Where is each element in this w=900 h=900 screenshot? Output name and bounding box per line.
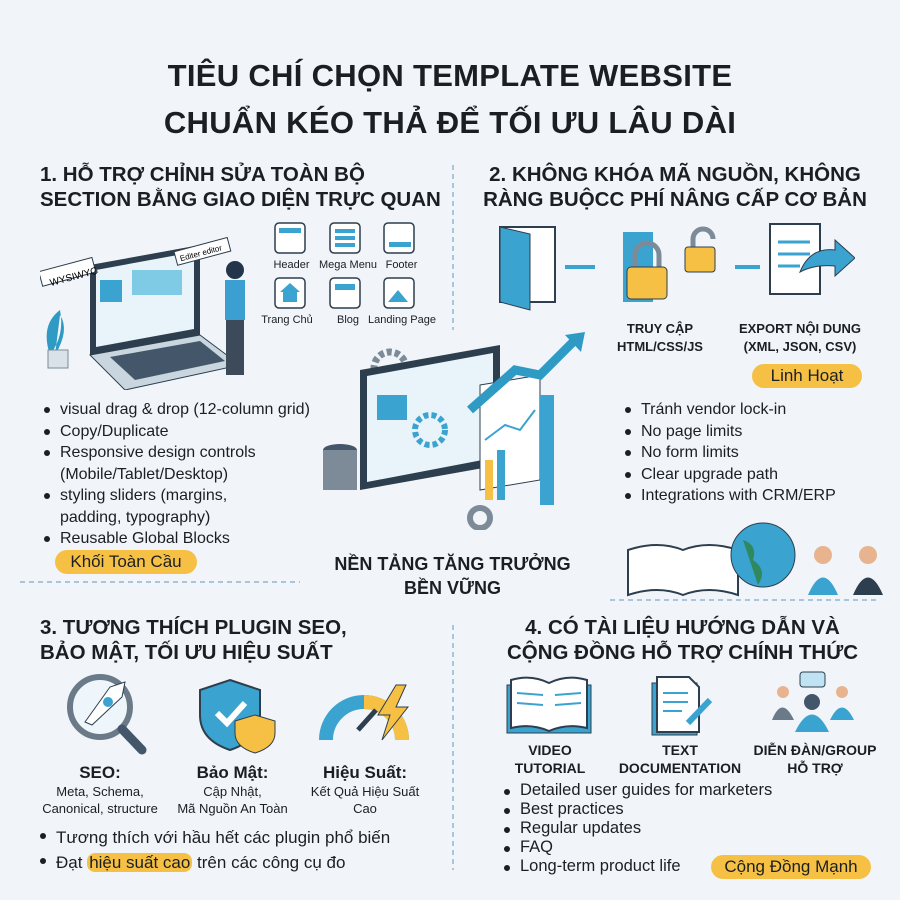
bullets panel 1 — [44, 401, 310, 547]
icons: page sections: Footer — [386, 259, 417, 271]
label: export: (XML, JSON, CSV) — [744, 339, 856, 354]
bullets panel 1: visual drag & drop (12-column grid) — [60, 401, 310, 418]
illustration: laptop editor: Editer editor — [179, 243, 223, 263]
illustration: monitor and charts — [323, 332, 585, 530]
pill: Khối Toàn Cầu — [55, 550, 197, 574]
label: SEO: Meta, Schema, — [56, 784, 144, 799]
bullets panel 1: Responsive design controls — [60, 444, 256, 461]
label: Hiệu Suất: Cao — [353, 801, 377, 816]
icon: book — [506, 676, 592, 734]
bullets panel 3: Tương thích với hầu hết các plugin phổ biến — [56, 828, 390, 847]
label: Hiệu Suất: Hiệu Suất: — [323, 763, 407, 782]
bullets panel 1: padding, typography) — [60, 508, 210, 526]
panel 4 heading: CỘNG ĐỒNG HỖ TRỢ CHÍNH THỨC — [507, 641, 858, 664]
center caption — [334, 553, 571, 598]
label: Bảo Mật: Bảo Mật: — [197, 763, 268, 782]
panel 2 heading: 2. KHÔNG KHÓA MÃ NGUỒN, KHÔNG — [489, 163, 861, 186]
bullets panel 4: FAQ — [520, 838, 553, 856]
bullets panel 2: Integrations with CRM/ERP — [641, 487, 836, 504]
label: Bảo Mật: Cập Nhật, — [203, 784, 262, 799]
icons: page sections — [261, 222, 436, 326]
panel 3 heading — [40, 616, 347, 664]
pill: Cộng Đồng Mạnh — [711, 855, 871, 879]
bullets panel 4: Regular updates — [520, 819, 641, 837]
label: Bảo Mật — [177, 763, 288, 816]
title: CHUẨN KÉO THẢ ĐỂ TỐI ƯU LÂU DÀI — [164, 105, 736, 140]
bullets panel 2 — [625, 401, 836, 504]
panel 4 heading — [507, 616, 858, 664]
label: SEO: Canonical, structure — [42, 801, 158, 816]
illustration: laptop editor — [40, 236, 245, 390]
label: forum: DIỄN ĐÀN/GROUP — [754, 742, 876, 758]
title: TIÊU CHÍ CHỌN TEMPLATE WEBSITE — [168, 58, 732, 93]
panel 3: SEO security performance — [40, 616, 420, 872]
bullets panel 4: Best practices — [520, 800, 624, 818]
label: text documentation: TEXT — [662, 742, 698, 758]
pill: Cộng Đồng Mạnh: Cộng Đồng Mạnh — [724, 857, 858, 876]
label: Hiệu Suất: Kết Quả Hiệu Suất — [311, 784, 419, 799]
bullets panel 1: (Mobile/Tablet/Desktop) — [60, 466, 228, 482]
label: truy cập — [617, 321, 703, 354]
label: text documentation: DOCUMENTATION — [619, 760, 741, 776]
center: growth platform — [323, 332, 585, 598]
bullets panel 1: Copy/Duplicate — [60, 422, 168, 440]
label: SEO: SEO: — [79, 763, 121, 782]
panel 4 heading: 4. CÓ TÀI LIỆU HƯỚNG DẪN VÀ — [525, 616, 840, 639]
label: export: EXPORT NỘI DUNG — [739, 321, 861, 336]
bullets panel 2: Tránh vendor lock-in — [641, 401, 786, 418]
center caption: NỀN TẢNG TĂNG TRƯỞNG — [334, 554, 571, 574]
label: forum: HỖ TRỢ — [787, 760, 843, 776]
icons: page sections: Header — [273, 259, 310, 271]
icon: shield — [199, 679, 276, 754]
label: video tutorial: TUTORIAL — [515, 760, 585, 776]
center caption: BỀN VỮNG — [404, 578, 501, 598]
bullets panel 4: Detailed user guides for marketers — [520, 781, 772, 799]
panel 4: documentation & community — [504, 616, 876, 879]
label: SEO — [42, 763, 158, 816]
label: Bảo Mật: Mã Nguồn An Toàn — [177, 801, 288, 816]
label: export — [739, 321, 861, 354]
bullets panel 3: Đạt hiệu suất cao trên các công cụ đo — [56, 853, 345, 872]
icons: page sections: Blog — [337, 314, 359, 326]
title — [164, 58, 736, 140]
icons: page sections: Mega Menu — [319, 259, 377, 271]
bullets panel 4 — [504, 781, 772, 875]
pill: Khối Toàn Cầu: Khối Toàn Cầu — [70, 552, 182, 571]
illustration: laptop editor: WYSIWYG — [49, 266, 100, 289]
label: truy cập: HTML/CSS/JS — [617, 339, 703, 354]
panel 1 heading: SECTION BẰNG GIAO DIỆN TRỰC QUAN — [40, 188, 441, 211]
label: text documentation — [619, 742, 741, 776]
panel 1 heading: 1. HỖ TRỢ CHỈNH SỬA TOÀN BỘ — [40, 163, 365, 186]
icon: seo rocket magnifier — [67, 674, 146, 754]
icon: gauge — [319, 684, 409, 740]
label: video tutorial: VIDEO — [528, 742, 572, 758]
panel 2 heading: RÀNG BUỘCC PHÍ NÂNG CẤP CƠ BẢN — [483, 188, 867, 211]
bullets panel 2: No page limits — [641, 422, 742, 440]
bullets panel 2: No form limits — [641, 444, 739, 461]
panel 2 heading — [483, 162, 867, 211]
panel 2: no lock-in — [483, 162, 883, 596]
bullets panel 1: styling sliders (margins, — [60, 487, 227, 504]
icons: page sections: Trang Chủ — [261, 314, 313, 326]
bullets panel 4: Long-term product life — [520, 857, 680, 875]
bullets panel 3 — [40, 828, 390, 872]
label: forum — [754, 742, 876, 776]
icon: community — [772, 672, 854, 732]
icon: document with pen — [652, 676, 712, 736]
panel 3 heading: 3. TƯƠNG THÍCH PLUGIN SEO, — [40, 616, 347, 639]
panel 3 heading: BẢO MẬT, TỐI ƯU HIỆU SUẤT — [40, 641, 333, 664]
pill: Linh Hoạt: Linh Hoạt — [771, 366, 843, 385]
panel 1 heading — [40, 162, 441, 211]
icons: page sections: Landing Page — [368, 314, 436, 326]
icons: door, locks, document — [499, 223, 855, 311]
illustration: book globe people — [627, 522, 883, 596]
bullets panel 2: Clear upgrade path — [641, 466, 778, 482]
panel 1: visual editing — [40, 162, 441, 574]
label: Hiệu Suất — [311, 763, 420, 816]
bullets panel 1: Reusable Global Blocks — [60, 530, 230, 547]
label: truy cập: TRUY CẬP — [627, 321, 693, 336]
label: video tutorial — [514, 742, 585, 776]
pill: Linh Hoạt — [752, 364, 862, 388]
